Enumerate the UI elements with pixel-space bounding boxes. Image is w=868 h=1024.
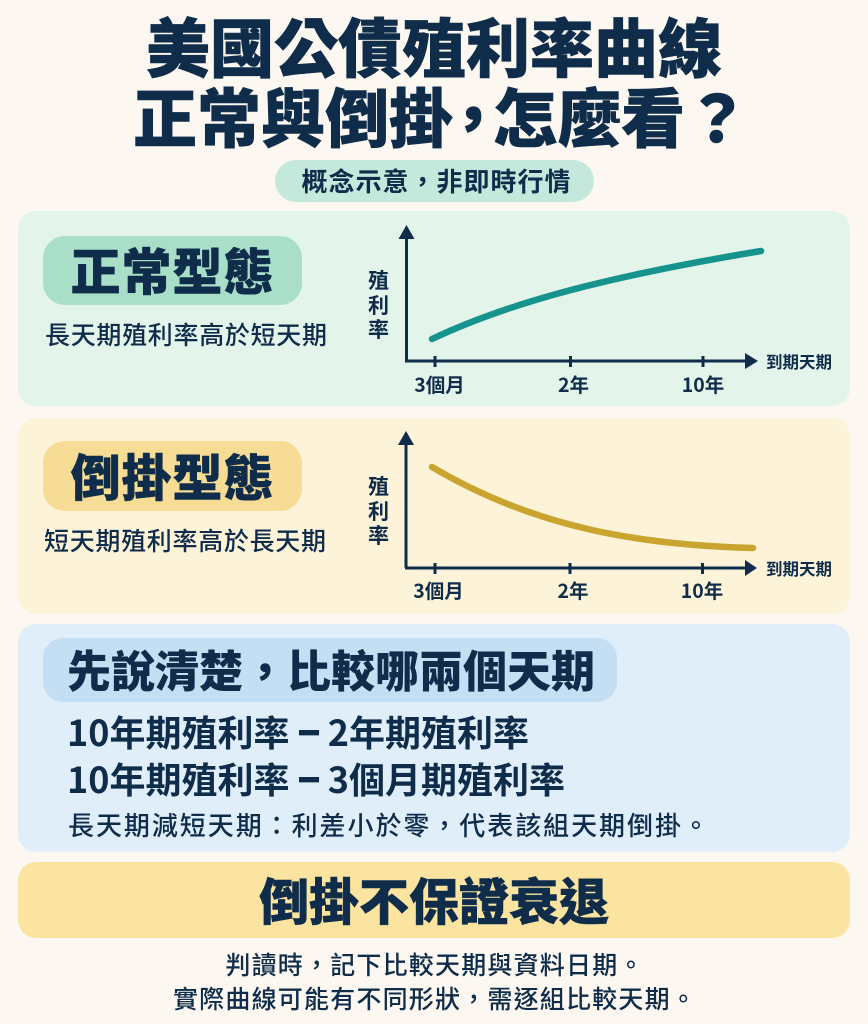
panel: which maturities [18, 624, 850, 852]
description: inverted: 短天期殖利率高於長天期 [44, 522, 327, 558]
formula 2: − [297, 747, 320, 809]
chart: normal curve: 率 [368, 314, 389, 344]
formula 1: − [297, 700, 320, 762]
footer note: 實際曲線可能有不同形狀，需逐組比較天期。 [173, 980, 697, 1016]
heading: inverted: 倒掛型態 [70, 439, 274, 511]
title: 美國公債殖利率曲線 [146, 0, 722, 91]
heading: compare: 先說清楚，比較哪兩個天期 [67, 636, 595, 700]
heading: normal: 正常型態 [70, 233, 274, 305]
chart: inverted curve: 率 [368, 520, 389, 550]
panel: inverted [18, 418, 850, 614]
footer note [173, 946, 697, 1016]
banner: 倒掛不保證衰退 [259, 863, 609, 935]
chart: inverted curve: 到期天期 [766, 556, 832, 580]
chart: normal curve: 殖 [368, 265, 389, 295]
chart: normal curve: 2年 [558, 369, 589, 398]
chart: normal curve: 利 [368, 290, 389, 320]
note: 長天期減短天期：利差小於零，代表該組天期倒掛。 [68, 806, 711, 843]
chart: inverted curve: 2年 [557, 575, 589, 604]
chart: inverted curve: 3個月 [413, 575, 464, 604]
formula 2: 10年期殖利率 3個月期殖利率 [67, 752, 565, 804]
title: 正常與倒掛，怎麼看？ [133, 69, 749, 161]
title [133, 0, 749, 161]
chart: normal curve: 3個月 [414, 369, 465, 398]
chart: normal curve: 到期天期 [766, 349, 832, 373]
formula 1: 10年期殖利率 2年期殖利率 [67, 705, 529, 757]
footer note: 判讀時，記下比較天期與資料日期。 [225, 946, 645, 982]
panel: normal [18, 211, 850, 406]
banner [18, 862, 850, 938]
description: normal: 長天期殖利率高於短天期 [45, 316, 328, 352]
chart: inverted curve: 利 [368, 496, 389, 526]
chart: inverted curve: 殖 [368, 471, 389, 501]
subtitle pill: 概念示意，非即時行情 [301, 162, 572, 199]
chart: inverted curve: 10年 [681, 575, 723, 604]
chart: normal curve [368, 225, 832, 398]
chart: inverted curve [368, 431, 832, 604]
chart: normal curve: 10年 [682, 369, 724, 398]
